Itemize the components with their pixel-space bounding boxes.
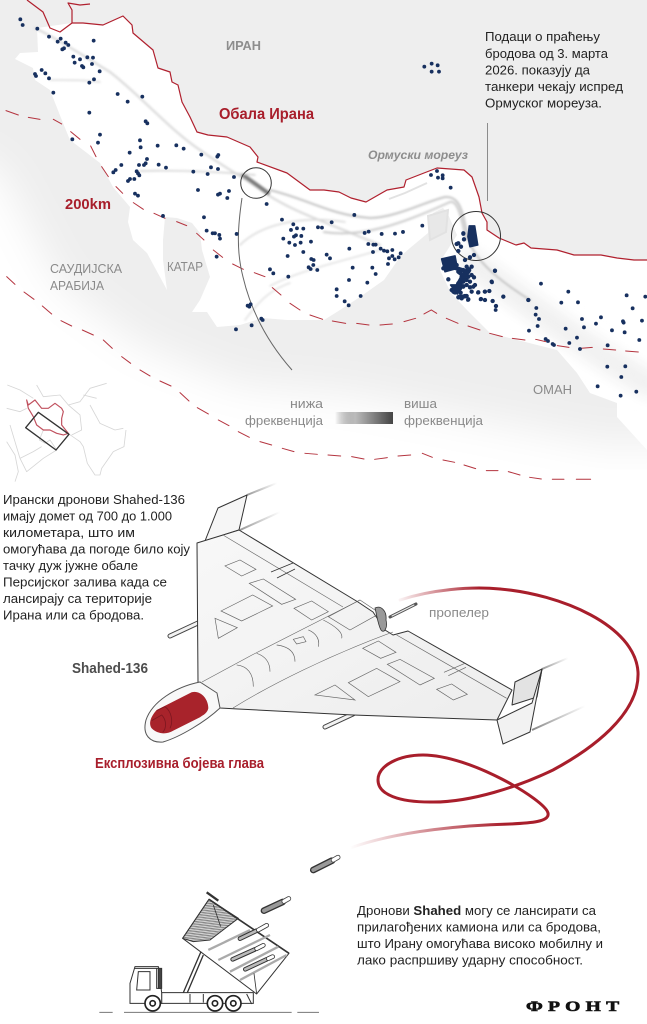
text: range of Shahed-136: Ирана или са бродова. — [3, 608, 144, 622]
text: range of Shahed-136: имају домет од 700 до 1.000 — [3, 508, 172, 524]
label: propeller: пропелер — [429, 605, 489, 620]
text: range of Shahed-136: Ирански дронови Shahed-136 — [3, 492, 185, 507]
arc: range radius — [238, 198, 292, 370]
logo: Front: ФРОНТ — [526, 998, 620, 1014]
islands near the strait — [389, 183, 448, 240]
text: mobile launch: прилагођених камиона или са бродова, — [357, 920, 601, 934]
flying drones — [264, 857, 338, 911]
engine and propeller — [375, 604, 416, 631]
wing-tip streaks — [247, 483, 277, 495]
text: range of Shahed-136: Персијског залива када се — [3, 574, 167, 590]
tail fin — [497, 669, 542, 744]
drones in the rack — [233, 925, 273, 969]
airframe — [197, 530, 512, 720]
land background — [0, 0, 647, 470]
text: range of Shahed-136: тачку дуж јужне обале — [3, 558, 138, 573]
text: range of Shahed-136: километара, што им — [3, 525, 135, 540]
legend: frequency: фреквенција — [245, 414, 323, 428]
truck chassis — [130, 967, 253, 1004]
circle: Gulf chokepoint — [241, 168, 271, 198]
legend: frequency — [245, 397, 483, 428]
label: coast of Iran: Обала Ирана — [219, 106, 314, 123]
annotation: ship tracking: Ормуског мореуза. — [485, 96, 602, 110]
wheels — [145, 996, 241, 1011]
text: mobile launch: Дронови Shahed могу се лансирати са — [357, 903, 594, 918]
label: Saudi Arabia: АРАБИЈА — [50, 278, 104, 293]
label: Oman: ОМАН — [533, 382, 572, 397]
left winglet — [205, 495, 247, 541]
drone: Shahed-136 — [145, 483, 585, 744]
fuselage and panel lines — [202, 535, 507, 708]
launcher truck with drones — [99, 857, 338, 1012]
label: Iran: ИРАН — [226, 38, 261, 53]
ground lines — [99, 1011, 319, 1014]
label: Strait of Hormuz: Ормуски мореуз — [368, 150, 468, 162]
legend: frequency: нижа — [290, 397, 323, 411]
hydraulic piston — [183, 952, 203, 993]
Iranian coastline — [27, 0, 647, 260]
legend: frequency: фреквенција — [404, 414, 483, 428]
text: mobile launch: што Ирану омогућава високо мобилну и — [357, 936, 603, 951]
fade of the land to white — [0, 130, 647, 560]
annotation: ship tracking: Подаци о праћењу — [485, 29, 600, 44]
annotation: ship tracking: 2026. показују да — [485, 62, 591, 78]
shipping lanes — [35, 28, 647, 385]
launch rack — [183, 892, 289, 994]
warhead — [150, 692, 208, 733]
text: range of Shahed-136: лансирају са територије — [3, 591, 152, 606]
flight path: red curve — [350, 588, 638, 848]
leader line — [486, 123, 488, 201]
label: 200km: 200km — [65, 196, 111, 213]
annotation: ship tracking: бродова од 3. марта — [485, 46, 609, 61]
underwing pods — [170, 623, 353, 727]
ship position dots — [20, 19, 645, 396]
legend: frequency: виша — [404, 397, 437, 411]
annotation: ship tracking: танкери чекају испред — [485, 79, 623, 94]
locator mini map — [7, 383, 126, 482]
text: mobile launch: лако распршиву ударну способност. — [357, 952, 583, 968]
map: shipping in the Persian Gulf — [0, 0, 647, 560]
text: range of Shahed-136: омогућава да погоде било коју — [3, 542, 190, 556]
nose cone — [145, 682, 220, 742]
label: Saudi Arabia: САУДИЈСКА — [50, 261, 122, 276]
label: Qatar: КАТАР — [167, 259, 203, 274]
200 km limit dashed line — [6, 111, 638, 479]
sea — [15, 16, 647, 450]
circle: Strait of Hormuz — [452, 212, 500, 260]
label: explosive warhead: Експлозивна бојева глава — [95, 756, 265, 772]
label: Shahed-136: Shahed-136 — [72, 660, 148, 677]
